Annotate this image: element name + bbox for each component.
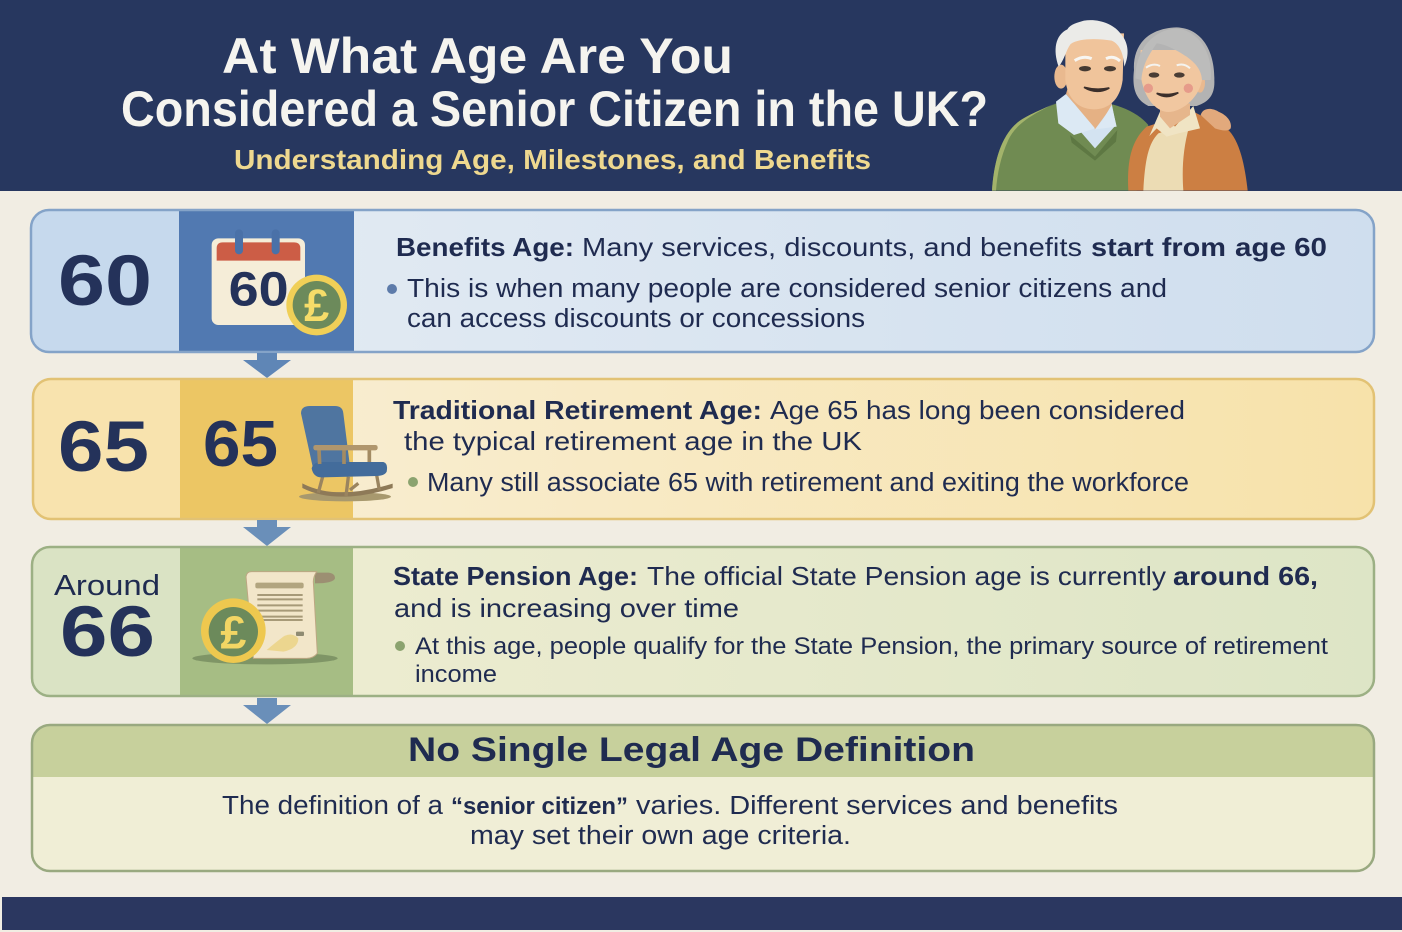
benefits heading: start from [1091,232,1226,262]
benefits heading: Benefits Age: [396,232,574,262]
age number 60: 60 [58,242,152,321]
age label around 66: Around [54,570,160,602]
icon: rocking chair [299,406,392,501]
subtitle: Understanding Age, Milestones, and Benefits [234,144,871,175]
panel: traditional retirement age 65 [33,379,1374,519]
icon: calendar with pound coin [212,229,347,335]
benefits bullet: This is when many people are considered senior citizens and [407,275,1167,303]
age number 65: 65 [58,408,149,487]
illustration: senior couple [992,20,1248,191]
pension bullet [395,633,1328,688]
title: Considered a Senior Citizen in the UK? [121,81,988,137]
pension bullet: At this age, people qualify for the State Pension, the primary source of retirement [415,633,1328,660]
woman [1128,112,1248,191]
retirement heading: the typical retirement age in the UK [404,426,863,456]
retirement heading: Traditional Retirement Age: [393,395,762,425]
panel: benefits age 60 [31,210,1374,352]
benefits bullet: can access discounts or concessions [407,305,865,333]
definition text: The definition of a [222,792,444,820]
title [121,28,988,137]
definition text: may set their own age criteria. [470,822,851,850]
title: At What Age Are You [222,28,733,84]
pension heading [393,561,1318,623]
definition text: varies. Different services and benefits [636,792,1118,820]
icon: calendar with pound coin: £ [304,280,329,331]
definition text: “senior citizen” [451,793,628,820]
retirement heading [393,395,1185,456]
age label around 66: 66 [60,593,155,672]
pension heading: State Pension Age: [393,561,638,591]
arrow: 65 to 66 [243,520,291,546]
icon: calendar with pound coin: 60 [229,262,289,316]
benefits bullet [387,275,1167,333]
panel: state pension age 66 [32,547,1374,696]
arrow: 60 to 65 [243,353,291,378]
man [992,103,1148,191]
pension bullet: income [415,661,497,688]
pension heading: around 66, [1173,561,1318,591]
age label around 66 [54,570,160,672]
arrow: 66 to definition [243,698,291,724]
icon: pension document with coin: £ [220,606,246,658]
age number 65 on icon column: 65 [203,407,278,480]
retirement heading: Age 65 has long been considered [770,395,1185,425]
benefits heading [396,232,1327,262]
retirement bullet: Many still associate 65 with retirement and exiting the workforce [427,469,1189,497]
benefits heading: age 60 [1235,232,1327,262]
benefits heading: Many services, discounts, and benefits [582,232,1082,262]
definition text [222,792,1118,850]
icon: pension document with coin [192,572,338,664]
pension heading: The official State Pension age is currently [647,561,1166,591]
pension heading: and is increasing over time [394,593,739,623]
panel: no single legal age definition [32,725,1374,871]
header banner [0,0,1402,191]
definition heading: No Single Legal Age Definition [408,731,975,769]
footer band [2,897,1402,930]
